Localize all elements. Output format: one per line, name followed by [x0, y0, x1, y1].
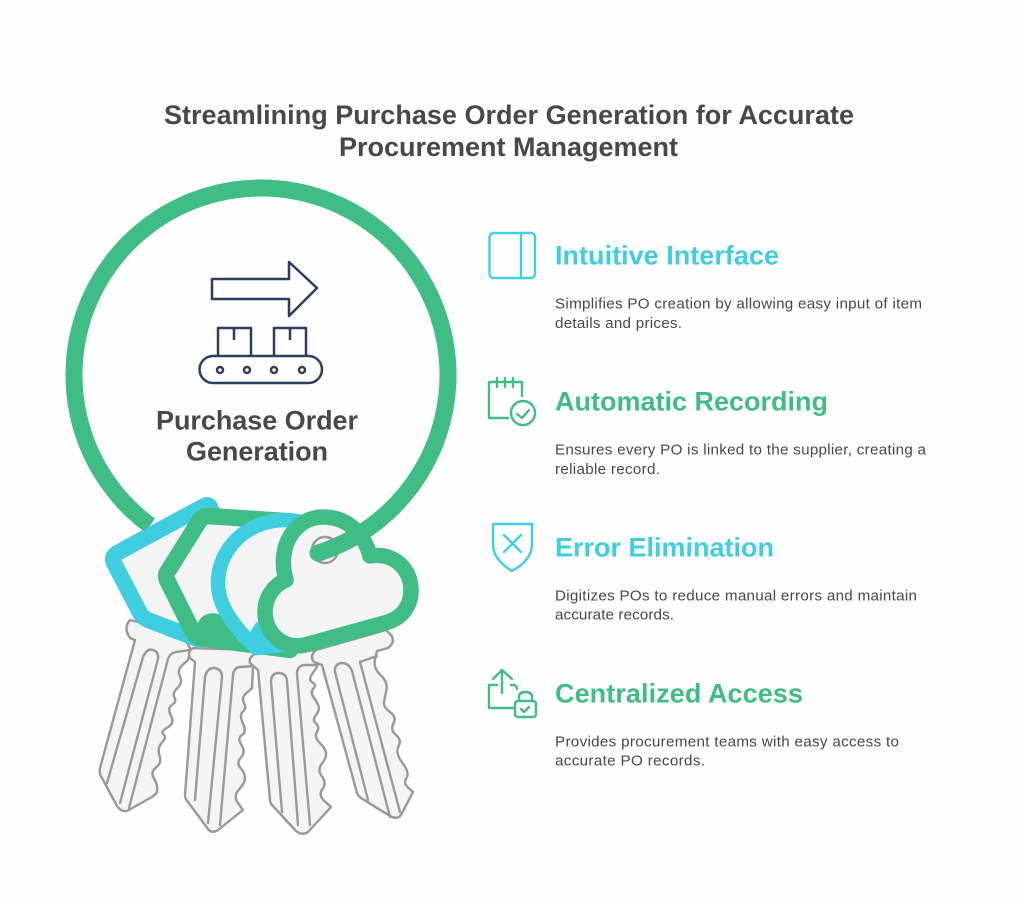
heading: Error Elimination	[555, 532, 774, 562]
description	[555, 296, 922, 332]
icon: calendar with check	[489, 378, 535, 425]
icon: upload with lock	[489, 670, 536, 717]
tag: green hexagon	[166, 516, 290, 650]
description: Ensures every PO is linked to the supplier, creating a	[555, 442, 927, 458]
circle label	[156, 406, 358, 466]
heading: Centralized Access	[555, 678, 803, 708]
icon: panel layout	[490, 233, 535, 278]
description: accurate PO records.	[555, 752, 705, 770]
tag: blue pentagon	[113, 505, 250, 640]
key 3	[250, 650, 331, 834]
description: Provides procurement teams with easy access to	[555, 734, 899, 750]
ring: left section behind the key tags	[74, 188, 261, 525]
circle label: Generation	[186, 436, 328, 466]
title: Streamlining Purchase Order Generation for Accurate	[164, 100, 854, 130]
item: centralized access	[489, 670, 899, 770]
key 1	[100, 620, 191, 811]
icon: arrow above conveyor belt	[200, 262, 322, 383]
heading: Automatic Recording	[555, 386, 828, 416]
heading: Intuitive Interface	[555, 240, 779, 270]
title: Procurement Management	[339, 132, 678, 162]
key 2	[185, 648, 254, 832]
item: intuitive interface	[490, 233, 922, 332]
description	[555, 588, 917, 624]
description	[555, 442, 927, 478]
description: details and prices.	[555, 315, 682, 332]
item: automatic recording	[489, 378, 927, 478]
item: error elimination	[493, 524, 917, 624]
description: Digitizes POs to reduce manual errors and maintain	[555, 588, 917, 604]
description: reliable record.	[555, 461, 660, 478]
description: Simplifies PO creation by allowing easy input of item	[555, 296, 922, 312]
description	[555, 734, 899, 770]
key 4	[312, 630, 413, 818]
ring: right section over the cloud tag	[261, 188, 448, 553]
key hole	[312, 537, 338, 563]
description: accurate records.	[555, 606, 674, 624]
tag: blue circle	[218, 520, 345, 654]
icon: shield with cross	[493, 524, 532, 571]
key ring illustration	[74, 188, 448, 834]
title	[164, 100, 854, 162]
circle label: Purchase Order	[156, 406, 358, 436]
tag: green cloud	[265, 517, 411, 646]
